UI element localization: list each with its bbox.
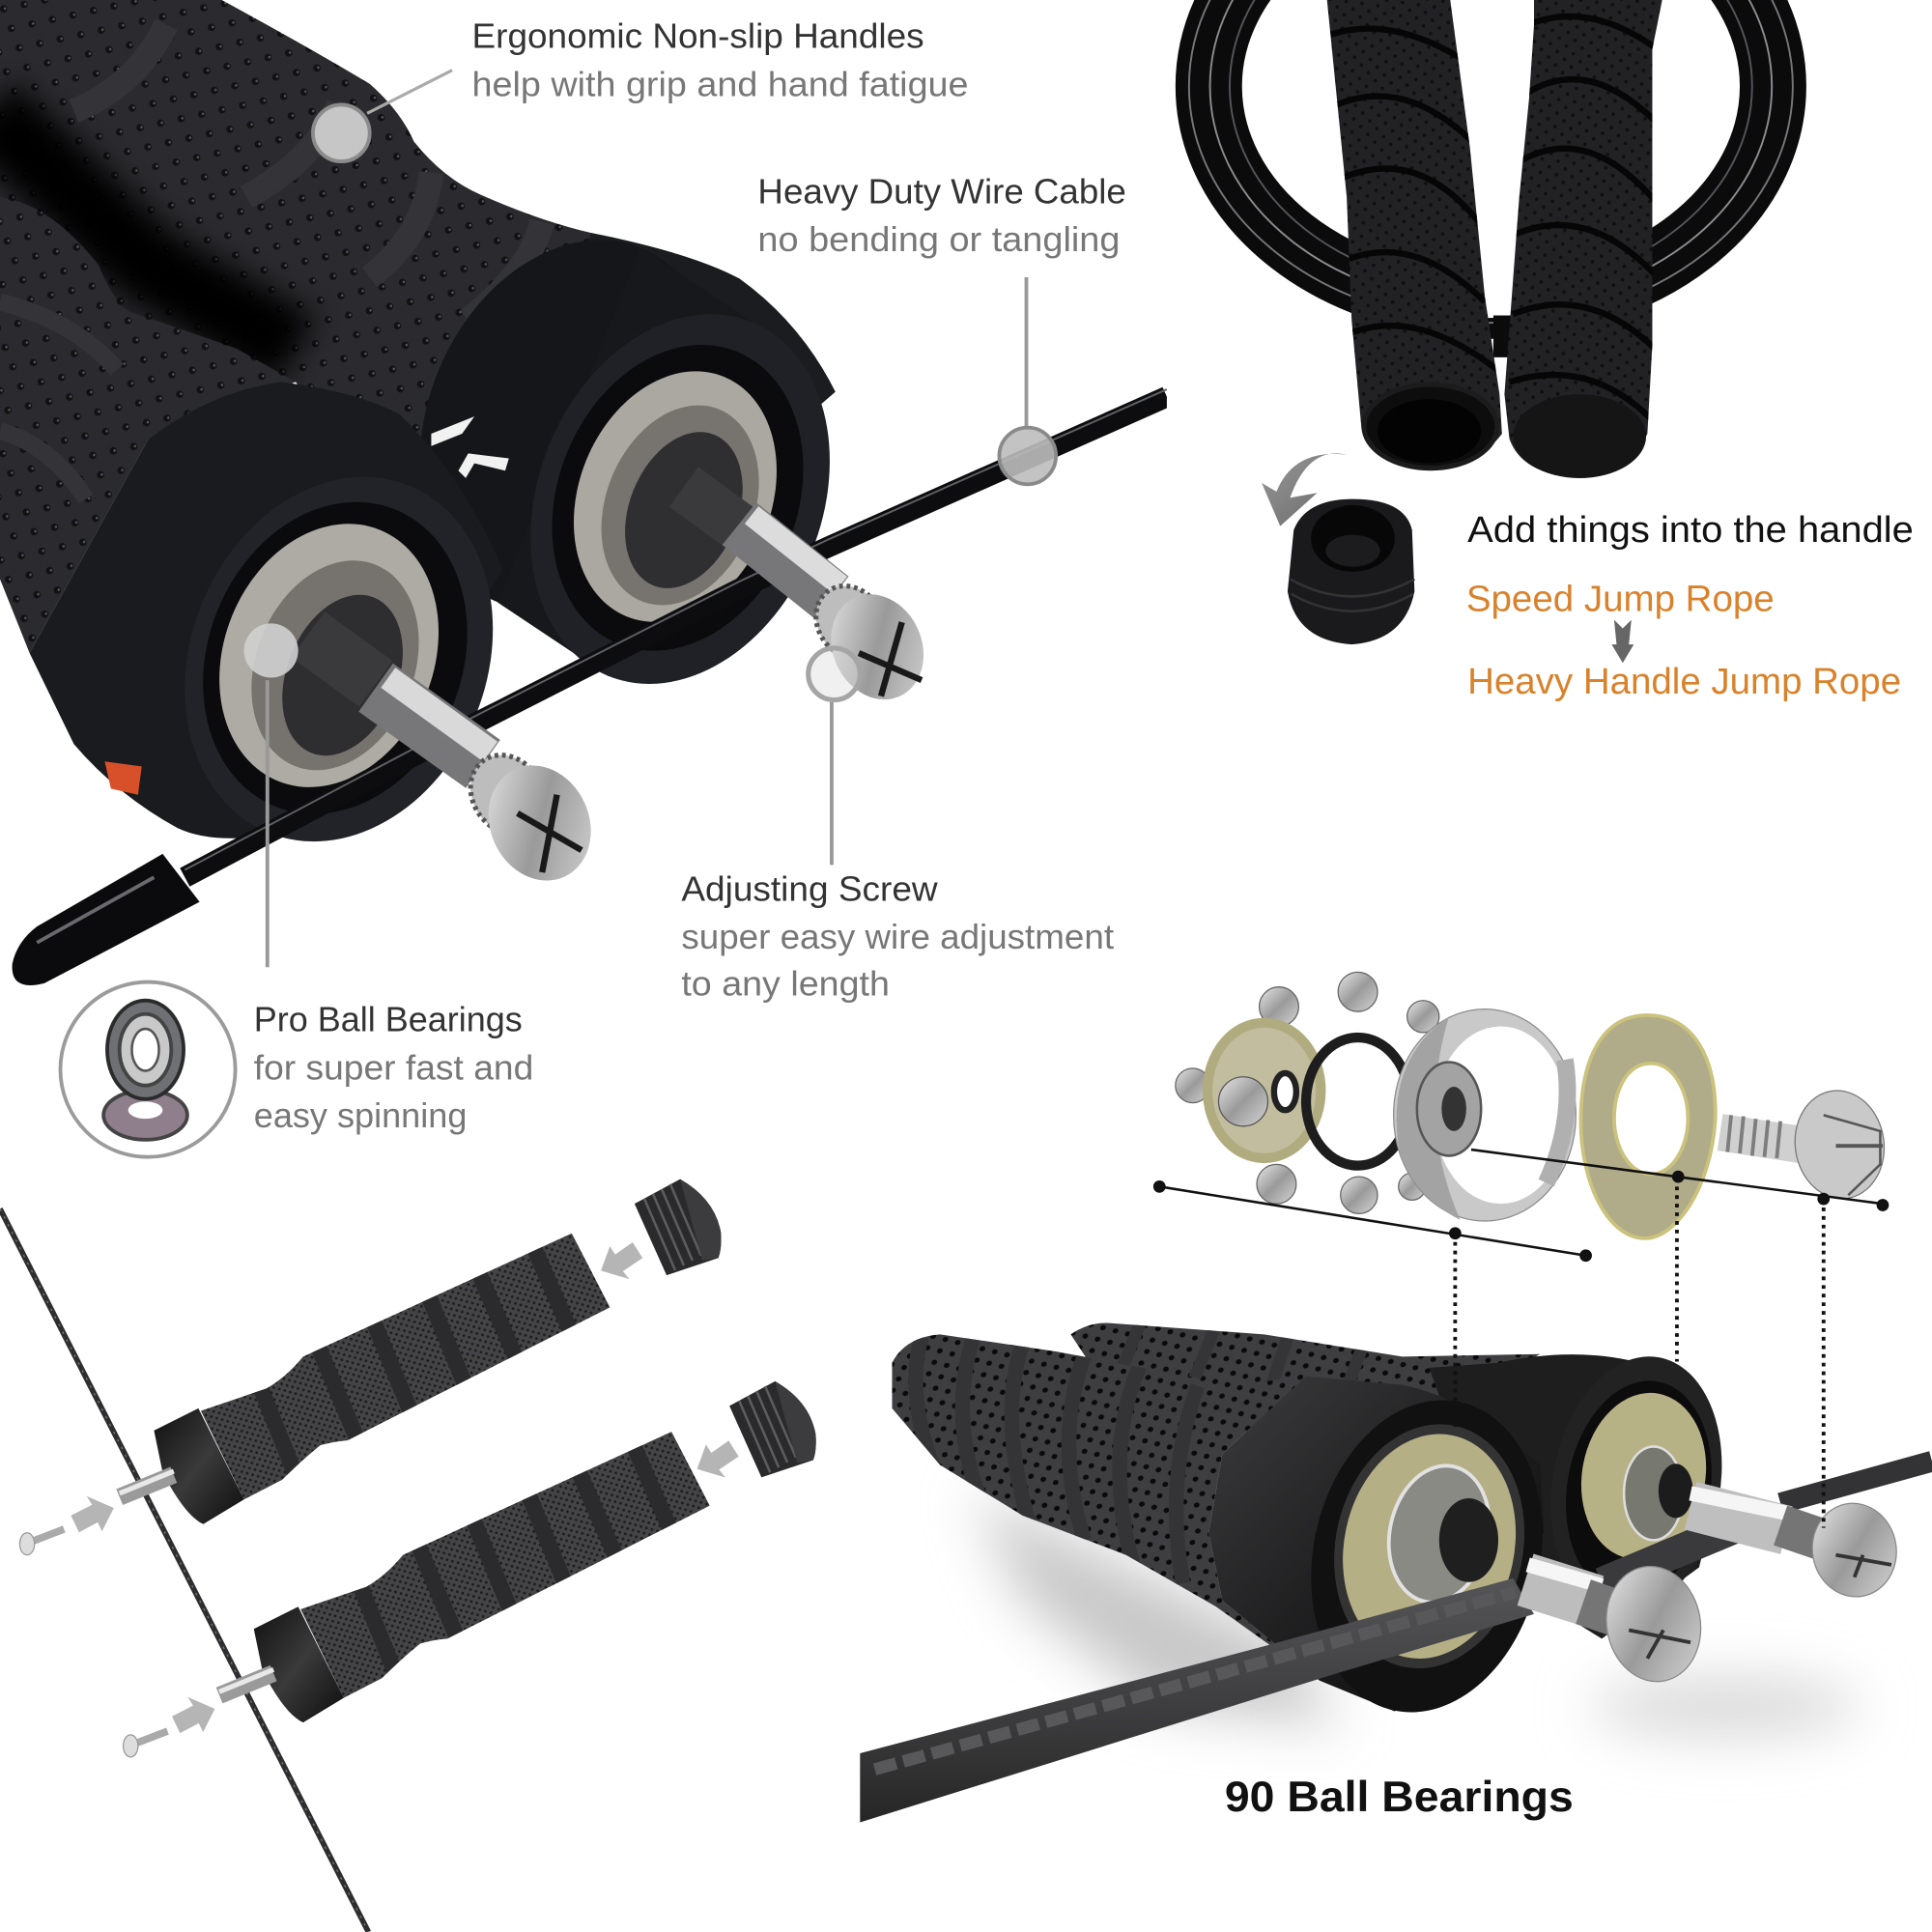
arrow: curved remove-plug arrow	[1262, 453, 1347, 526]
render: back screw and knob	[1690, 1493, 1904, 1604]
label: ergonomic handles: help with grip and hand fatigue	[472, 65, 969, 103]
photo: front adjusting screw	[308, 635, 610, 897]
callout marker: bearings	[244, 623, 298, 967]
handle two, side view	[219, 1418, 728, 1722]
photo: front handle cap	[29, 383, 509, 842]
arrow: screw one into pin	[67, 1490, 120, 1539]
small screw one	[19, 1529, 64, 1555]
photo: back handle grip	[0, 0, 740, 437]
render: back handle cap	[1430, 1343, 1742, 1638]
exploded part: silver outer ring	[1394, 1009, 1576, 1221]
label: ergonomic handles	[472, 17, 969, 103]
photo: back handle cap	[421, 233, 836, 684]
floor shadows	[974, 1491, 1861, 1736]
text: add things into the handle: Add things into the handle	[1467, 509, 1914, 551]
arrow: screw two into pin	[168, 1690, 220, 1740]
arrow: plug two into handle	[689, 1435, 745, 1487]
label: wire cable: Heavy Duty Wire Cable	[757, 172, 1126, 211]
photo: left hollow handle	[1327, 0, 1502, 469]
label: pro ball bearings: Pro Ball Bearings	[254, 1001, 523, 1039]
text: 90 ball bearings: 90 Ball Bearings	[1225, 1774, 1574, 1821]
panel: 90 ball bearings exploded view	[860, 972, 1932, 1822]
text: speed jump rope: Speed Jump Rope	[1466, 579, 1775, 620]
leader lines: assembly alignment	[1154, 1150, 1889, 1528]
photo: back adjusting screw	[684, 487, 940, 715]
text: heavy handle jump rope: Heavy Handle Jump Rope	[1467, 661, 1901, 702]
exploded part: threaded screw	[1720, 1085, 1891, 1205]
panel: handle assembly diagram	[0, 1179, 816, 1932]
panel: hollow handles and removable plug	[1189, 0, 1914, 702]
icon: ball bearings in circle	[60, 982, 236, 1157]
photo: front handle grip	[0, 197, 296, 653]
arrow: speed to heavy	[1611, 620, 1634, 663]
label: pro ball bearings	[254, 1001, 533, 1135]
render: front handle cap	[1208, 1377, 1571, 1734]
label: wire cable	[757, 172, 1126, 259]
callout marker: handles	[313, 71, 452, 161]
exploded part: gold retainer	[1208, 1023, 1321, 1158]
label: adjusting screw: Adjusting Screw	[681, 869, 938, 908]
render: front rope	[860, 1578, 1534, 1822]
exploded part: balls	[1176, 972, 1439, 1213]
photo: right capped handle	[1504, 0, 1662, 478]
arrow: plug one into handle	[593, 1236, 648, 1289]
handle one, side view	[120, 1220, 629, 1524]
callout marker: wire cable	[999, 277, 1056, 484]
callout marker: adjusting screw	[809, 648, 860, 865]
label: adjusting screw	[681, 869, 1114, 1004]
small screw two	[124, 1731, 167, 1757]
label: ergonomic handles: Ergonomic Non-slip Handles	[472, 17, 924, 56]
render: textured grip bodies	[892, 1323, 1540, 1681]
label: adjusting screw: to any length	[681, 965, 890, 1004]
render: back rope segments	[1602, 1462, 1932, 1583]
exploded part: black C-ring	[1306, 1037, 1409, 1166]
exploded part: gold washer	[1580, 1015, 1716, 1238]
label: wire cable: no bending or tangling	[757, 220, 1120, 259]
label: pro ball bearings: easy spinning	[254, 1096, 467, 1135]
photo: wire cable with end sleeve	[13, 389, 1167, 985]
panel: close-up of handles with callouts	[0, 0, 1167, 985]
plug two	[729, 1381, 816, 1477]
photo: rubber plug	[1288, 499, 1414, 644]
photo: coiled rope behind handles	[1189, 0, 1793, 357]
render: front screw and knob	[1525, 1559, 1710, 1690]
label: adjusting screw: super easy wire adjustment	[681, 918, 1114, 956]
jump rope cable, long	[0, 1208, 368, 1932]
plug one	[635, 1179, 721, 1275]
label: pro ball bearings: for super fast and	[254, 1048, 533, 1087]
